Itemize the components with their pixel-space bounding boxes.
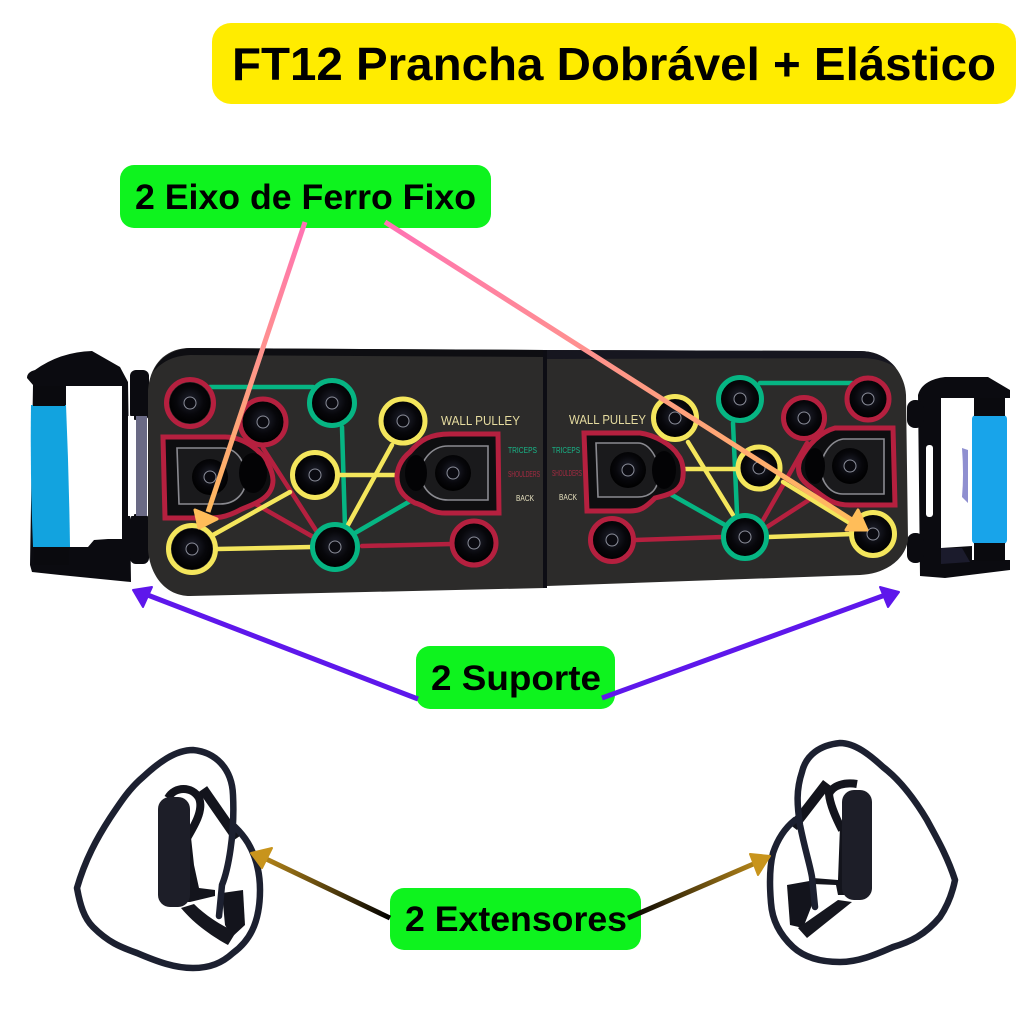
- arrow: gold to right extensor: [628, 854, 770, 918]
- buttons and rings: [166, 380, 496, 572]
- left handle: [27, 351, 149, 582]
- label: 2 Suporte: [416, 646, 615, 709]
- buttons and rings: [590, 378, 894, 562]
- wall pulley labels: WALL PULLEY: [569, 412, 646, 427]
- label: 2 Extensores: 2 Extensores: [405, 900, 627, 939]
- connector lines: [635, 383, 853, 540]
- left socket: [584, 433, 683, 511]
- folding board: left panel: [148, 348, 545, 596]
- connector lines: [210, 387, 452, 549]
- label: 2 Extensores: [390, 888, 641, 950]
- arrow: gold to left extensor: [251, 848, 390, 918]
- label: 2 Eixo de Ferro Fixo: 2 Eixo de Ferro Fixo: [135, 178, 476, 217]
- wall pulley labels: [552, 412, 646, 502]
- title: [212, 23, 1016, 104]
- arrow: purple to right support: [602, 587, 899, 698]
- right extensor band: [770, 743, 955, 962]
- right handle: [907, 377, 1010, 578]
- wall pulley labels: BACK: [516, 494, 535, 503]
- arrow: pink to right axle: [385, 222, 867, 530]
- right socket: [798, 428, 895, 505]
- wall pulley labels: TRICEPS: [508, 446, 537, 455]
- wall pulley labels: WALL PULLEY: [441, 413, 520, 428]
- folding board: right panel: [543, 350, 908, 588]
- wall pulley labels: TRICEPS: [552, 446, 580, 455]
- label: 2 Eixo de Ferro Fixo: [120, 165, 491, 228]
- right socket: [397, 434, 499, 513]
- arrow: pink to left axle: [195, 222, 305, 528]
- left extensor band: [77, 750, 260, 968]
- wall pulley labels: BACK: [559, 493, 578, 502]
- arrow: purple to left support: [133, 587, 418, 699]
- left socket: [163, 437, 273, 518]
- title: FT12 Prancha Dobrável + Elástico: [232, 38, 996, 90]
- wall pulley labels: SHOULDERS: [552, 469, 582, 478]
- label: 2 Suporte: 2 Suporte: [431, 659, 601, 698]
- wall pulley labels: SHOULDERS: [508, 470, 540, 479]
- wall pulley labels: [441, 413, 540, 503]
